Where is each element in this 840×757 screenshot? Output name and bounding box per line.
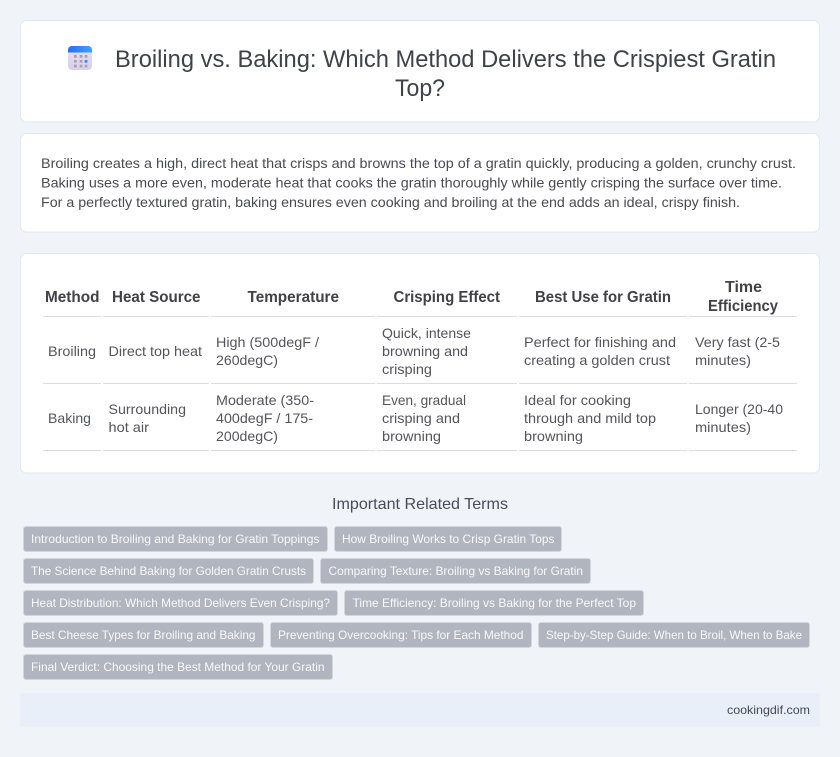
title: Top? — [395, 75, 445, 102]
panel: summary paragraph — [20, 134, 820, 232]
table row: baking: browning — [524, 428, 583, 444]
panel: related term tags: Final Verdict: Choosing the Best Method for Your Gratin — [31, 660, 324, 674]
table row: broiling: Quick, intense — [382, 325, 471, 341]
table header row — [45, 279, 778, 315]
table row: broiling: minutes) — [695, 352, 751, 368]
panel: related term tags: The Science Behind Baking for Golden Gratin Crusts — [31, 564, 306, 578]
panel: related term tags: Step-by-Step Guide: When to Broil, When to Bake — [546, 628, 802, 642]
table row: baking — [48, 392, 783, 444]
icon: calendar — [68, 46, 92, 70]
panel: related term tags: Introduction to Broiling and Baking for Gratin Toppings — [31, 532, 320, 546]
table row: baking: Moderate (350- — [216, 392, 314, 408]
table header row: Best Use for Gratin — [535, 289, 671, 306]
table row: broiling: crisping — [382, 361, 432, 377]
footer bar — [20, 693, 820, 727]
panel: title header — [20, 20, 820, 122]
panel: related term tags: How Broiling Works to Crisp Gratin Tops — [342, 532, 554, 546]
table row: baking: crisping and — [382, 410, 460, 426]
table row: broiling: 260degC) — [216, 352, 278, 368]
title: Broiling vs. Baking: Which Method Delivers the Crispiest Gratin — [115, 46, 776, 73]
table row: broiling: creating a golden crust — [524, 352, 670, 368]
table row: broiling: Very fast (2-5 — [695, 334, 780, 350]
footer bar: cookingdif.com — [727, 703, 810, 717]
title — [115, 46, 776, 102]
panel: summary paragraph: For a perfectly textured gratin, baking ensures even cooking and broiling at the end adds an ideal, crispy finish. — [41, 194, 740, 210]
table header row: Time — [725, 279, 762, 296]
table header row: Heat Source — [112, 289, 201, 306]
table row: baking: browning — [382, 428, 441, 444]
heading: related terms: Important Related Terms — [332, 496, 508, 513]
panel: summary paragraph: Broiling creates a high, direct heat that crisps and browns the top of a gratin quickly, producing a golden, crunchy crust. — [41, 155, 796, 171]
table row: baking: Ideal for cooking — [524, 392, 631, 408]
table row: broiling: browning and — [382, 343, 468, 359]
panel: related term tags: Heat Distribution: Which Method Delivers Even Crisping? — [31, 596, 330, 610]
panel: related term tags — [24, 526, 810, 680]
table row: baking: Surrounding — [108, 401, 186, 417]
table row: broiling: Broiling — [48, 343, 96, 359]
table row: broiling — [48, 325, 780, 377]
table row: baking: Longer (20-40 — [695, 401, 783, 417]
panel: related term tags: Comparing Texture: Broiling vs Baking for Gratin — [328, 564, 583, 578]
panel: related term tags: Preventing Overcooking: Tips for Each Method — [278, 628, 524, 642]
table header row: Temperature — [248, 289, 339, 306]
panel: related term tags: Time Efficiency: Broiling vs Baking for the Perfect Top — [352, 596, 636, 610]
table row: broiling: Direct top heat — [108, 343, 202, 359]
table row: baking: 200degC) — [216, 428, 278, 444]
table header row: Method — [45, 289, 100, 306]
table row: broiling: Perfect for finishing and — [524, 334, 676, 350]
table header row: Efficiency — [708, 298, 778, 315]
table header row: Crisping Effect — [394, 289, 501, 306]
table row: baking: Even, gradual — [382, 392, 466, 408]
table row: baking: minutes) — [695, 419, 751, 435]
table row: baking: hot air — [108, 419, 149, 435]
table row: baking: through and mild top — [524, 410, 656, 426]
panel: related term tags: Best Cheese Types for Broiling and Baking — [31, 628, 256, 642]
panel: summary paragraph: Baking uses a more even, moderate heat that cooks the gratin thoroughly while gently crisping the surface over time. — [41, 174, 782, 190]
panel: comparison table — [20, 254, 820, 473]
table row: broiling: High (500degF / — [216, 334, 319, 350]
table row: baking: 400degF / 175- — [216, 410, 313, 426]
table row: baking: Baking — [48, 410, 91, 426]
